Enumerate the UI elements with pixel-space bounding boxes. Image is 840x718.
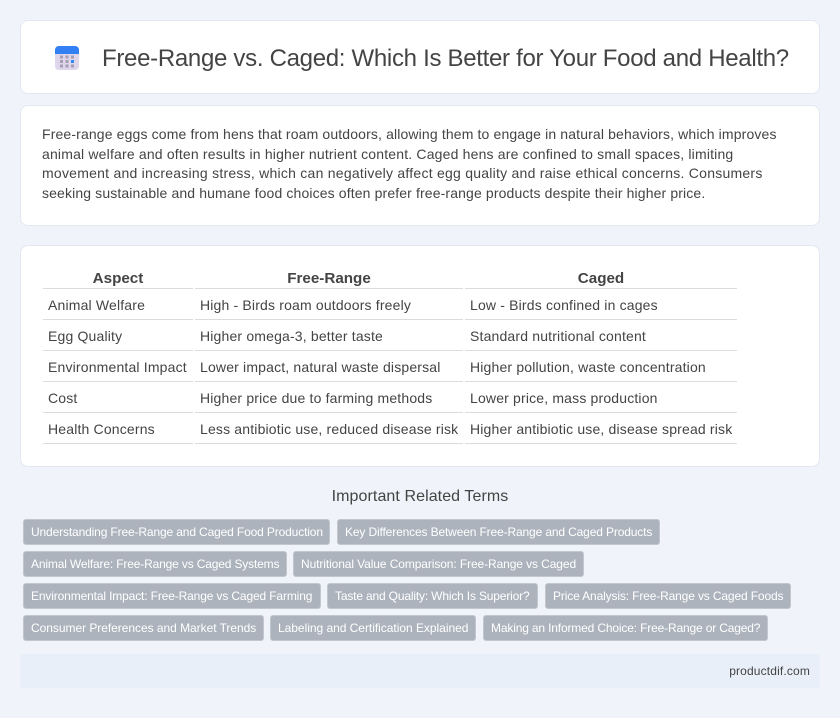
related terms tag list: Making an Informed Choice: Free-Range or Caged? bbox=[491, 621, 760, 635]
text block: description: movement and increasing stress, which can negatively affect egg quality and raise ethical concerns. Consumers bbox=[42, 165, 763, 181]
text block: description: seeking sustainable and humane food choices often prefer free-range products despite their higher price. bbox=[42, 184, 705, 200]
table row: egg quality bbox=[48, 328, 646, 344]
related terms tag list: Consumer Preferences and Market Trends bbox=[31, 621, 256, 635]
table row: animal welfare bbox=[48, 297, 658, 313]
panel: description bbox=[20, 105, 820, 226]
table row: health concerns bbox=[48, 421, 732, 437]
related terms tag list: Price Analysis: Free-Range vs Caged Foods bbox=[553, 589, 783, 603]
related terms heading: Important Related Terms bbox=[332, 488, 508, 505]
table row: environmental impact: Higher pollution, waste concentration bbox=[470, 359, 706, 375]
table header: caged: Caged bbox=[578, 270, 624, 287]
text block: description: animal welfare and often results in higher nutrient content. Caged hens are confined to small spaces, limiting bbox=[42, 146, 733, 162]
title: Free-Range vs. Caged: Which Is Better for Your Food and Health? bbox=[102, 45, 789, 72]
table row: egg quality: Higher omega-3, better taste bbox=[200, 328, 383, 344]
text block: description: Free-range eggs come from hens that roam outdoors, allowing them to engage in natural behaviors, which improves bbox=[42, 126, 777, 142]
related terms tag list: Labeling and Certification Explained bbox=[278, 621, 468, 635]
table row: animal welfare: Low - Birds confined in cages bbox=[470, 297, 658, 313]
header panel bbox=[20, 20, 820, 94]
footer bar bbox=[20, 654, 820, 688]
table row: cost bbox=[48, 390, 658, 406]
related terms tag list: Understanding Free-Range and Caged Food Production bbox=[31, 525, 323, 539]
related terms tag list: Nutritional Value Comparison: Free-Range vs Caged bbox=[301, 557, 576, 571]
footer source text: productdif.com bbox=[729, 664, 810, 678]
text block: description bbox=[42, 126, 777, 201]
table row: cost: Cost bbox=[48, 390, 77, 406]
table row: cost: Lower price, mass production bbox=[470, 390, 658, 406]
table row: environmental impact: Environmental Impact bbox=[48, 359, 187, 375]
table header: free-range: Free-Range bbox=[287, 270, 371, 287]
table row: cost: Higher price due to farming methods bbox=[200, 390, 432, 406]
related terms tag list: Animal Welfare: Free-Range vs Caged Systems bbox=[31, 557, 279, 571]
related terms tag list: Key Differences Between Free-Range and Caged Products bbox=[345, 525, 652, 539]
related terms tag list: Environmental Impact: Free-Range vs Caged Farming bbox=[31, 589, 312, 603]
table row: egg quality: Standard nutritional content bbox=[470, 328, 646, 344]
icon: calendar bbox=[55, 46, 79, 70]
table row: egg quality: Egg Quality bbox=[48, 328, 122, 344]
table row: animal welfare: High - Birds roam outdoors freely bbox=[200, 297, 411, 313]
table row: health concerns: Health Concerns bbox=[48, 421, 155, 437]
table row: health concerns: Higher antibiotic use, disease spread risk bbox=[470, 421, 732, 437]
related terms tag list: Taste and Quality: Which Is Superior? bbox=[335, 589, 529, 603]
table row: animal welfare: Animal Welfare bbox=[48, 297, 145, 313]
table row: environmental impact bbox=[48, 359, 706, 375]
table row: health concerns: Less antibiotic use, reduced disease risk bbox=[200, 421, 458, 437]
related terms tag list bbox=[23, 519, 791, 641]
table row: environmental impact: Lower impact, natural waste dispersal bbox=[200, 359, 441, 375]
table header: aspect: Aspect bbox=[93, 270, 143, 287]
panel: comparison table bbox=[20, 245, 820, 467]
